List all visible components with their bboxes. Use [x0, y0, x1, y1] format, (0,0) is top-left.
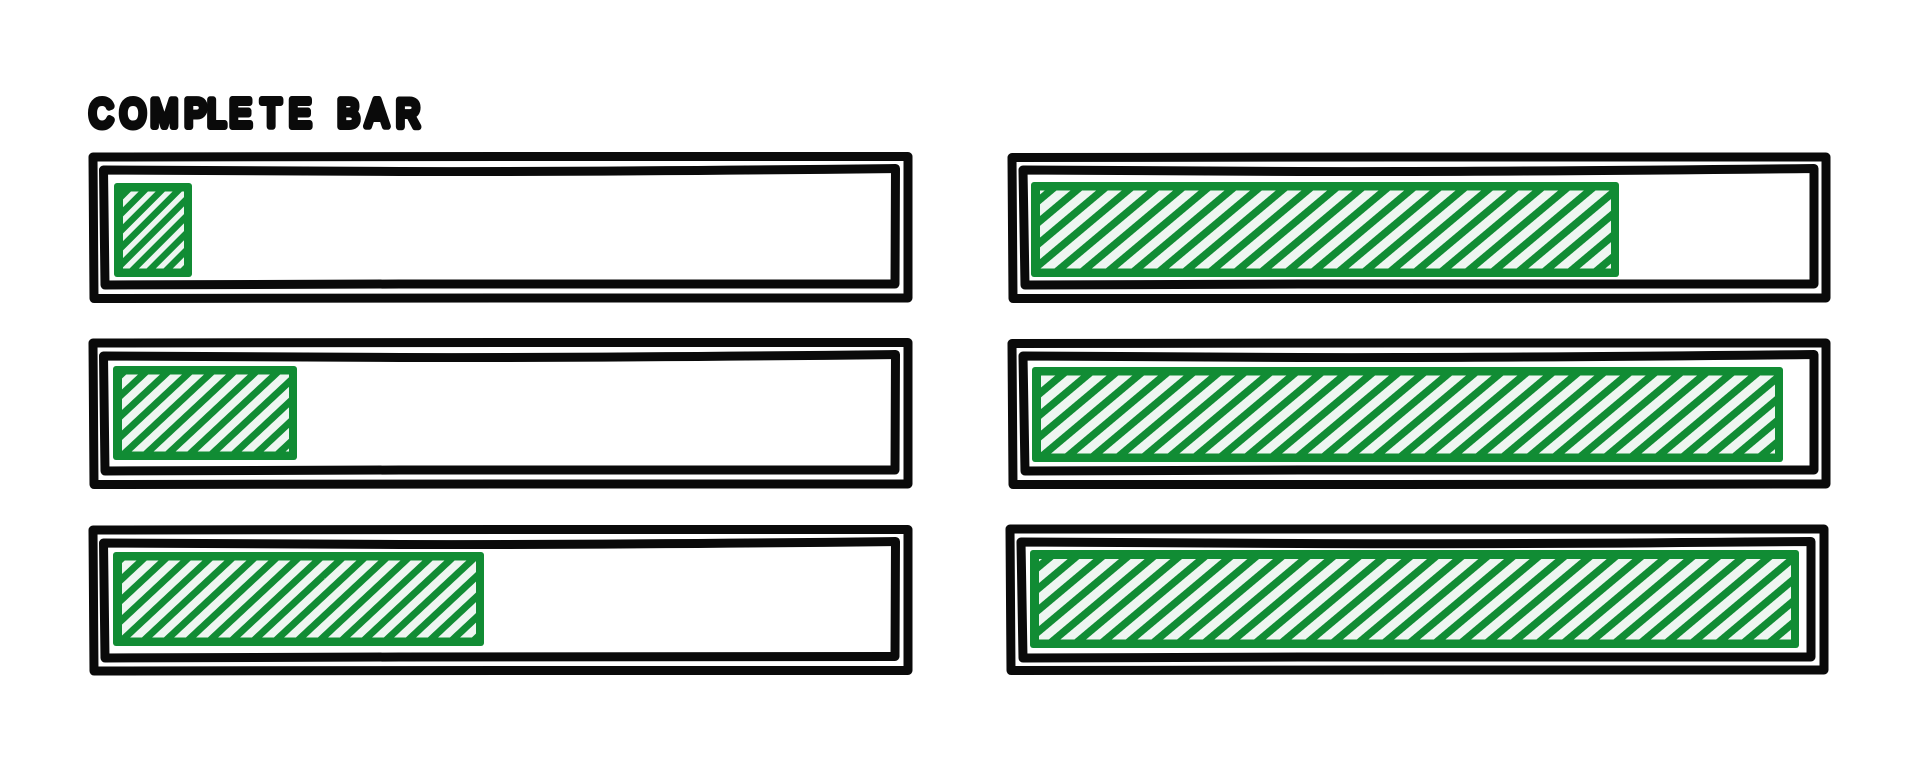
- progress bar: right row 2: [1012, 343, 1826, 484]
- progress bar: left row 1: [93, 156, 908, 298]
- progress bar: right row 3: [1010, 529, 1824, 670]
- progress bar: left row 3: [93, 530, 908, 671]
- title: COMPLETE BAR: [89, 91, 420, 135]
- progress bar: right row 1: [1012, 157, 1826, 298]
- progress bar: left row 2: [93, 342, 908, 484]
